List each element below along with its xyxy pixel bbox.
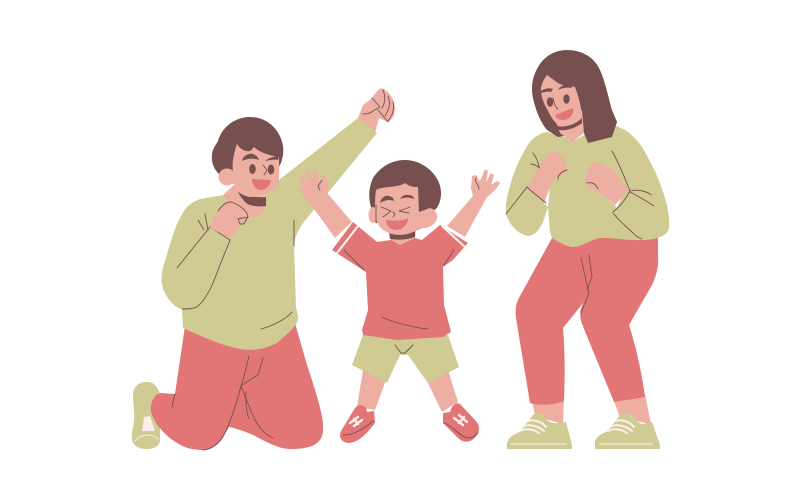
- mouth: [386, 218, 408, 230]
- neck shadow: [389, 230, 415, 240]
- neck shadow: [238, 192, 266, 206]
- nose: [263, 165, 267, 175]
- boy shoes: [340, 403, 479, 443]
- boy right arm: [447, 169, 500, 237]
- mother legs: [532, 394, 651, 424]
- figure: mother: [506, 50, 669, 449]
- neck shadow and chin hair: [552, 118, 582, 130]
- father raised arm and fist: [358, 88, 395, 133]
- hair: [532, 50, 617, 143]
- boy neck: [389, 230, 416, 245]
- mother head: [532, 50, 617, 143]
- eyebrows: [242, 154, 259, 161]
- father sweater: [162, 118, 377, 350]
- father head: [212, 117, 283, 217]
- face: [375, 183, 437, 235]
- mother left fist: [528, 152, 567, 203]
- boy left arm: [298, 170, 352, 238]
- mother trousers: [516, 236, 658, 405]
- boy legs: [357, 370, 458, 412]
- mother shoes: [507, 413, 660, 449]
- ear: [368, 207, 378, 223]
- boy shorts: [352, 335, 459, 383]
- figure: father kneeling: [132, 88, 395, 450]
- father fist: [210, 202, 248, 238]
- mother sleeve gaps: [544, 188, 622, 208]
- father shoe: [132, 382, 160, 449]
- mouth: [252, 179, 271, 190]
- ear line: [375, 205, 377, 223]
- eye and brow lines: [380, 195, 414, 217]
- boy shirt details: [337, 226, 465, 329]
- father trouser creases: [172, 356, 273, 450]
- face: [233, 144, 279, 197]
- eyes: [249, 164, 256, 174]
- mother trouser creases: [581, 255, 592, 313]
- nose: [553, 98, 558, 109]
- mother right fist: [585, 162, 628, 205]
- eyebrows: [541, 85, 572, 93]
- boy t-shirt: [332, 222, 468, 340]
- boy head: [368, 160, 441, 240]
- hair: [369, 160, 441, 223]
- mother sweater lines: [506, 151, 654, 239]
- eyes: [547, 97, 553, 107]
- ear: [218, 168, 236, 186]
- figure: boy cheering: [298, 160, 500, 443]
- hair: [212, 117, 283, 178]
- face: [541, 75, 582, 127]
- ear join: [227, 171, 236, 184]
- neck: [556, 110, 584, 142]
- mouth: [555, 108, 573, 120]
- boy shorts crease: [395, 345, 413, 353]
- neck: [223, 183, 268, 217]
- father sweater lines: [177, 214, 294, 329]
- mother sweater: [506, 122, 669, 247]
- father trousers: [151, 323, 323, 450]
